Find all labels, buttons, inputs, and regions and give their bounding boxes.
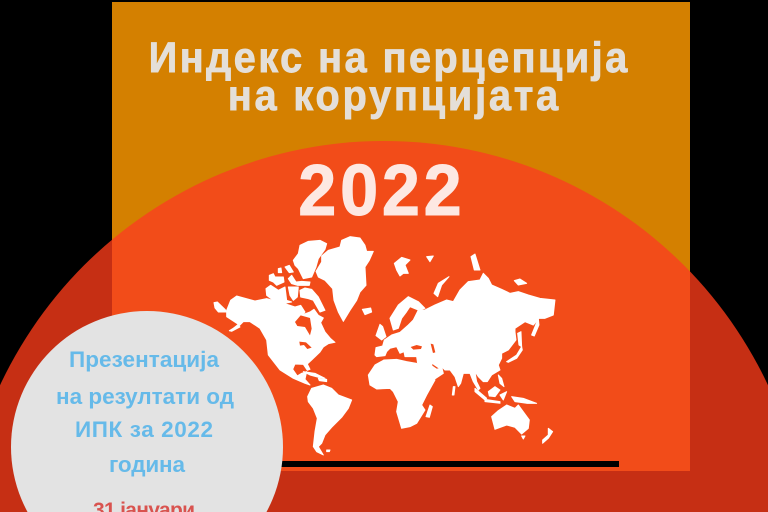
Greenland [316, 237, 373, 321]
Cuba [303, 372, 325, 378]
title: Индекс на перцепција [149, 33, 628, 81]
Africa [368, 359, 435, 428]
Northern Eurasia islands [394, 254, 527, 297]
New Zealand [543, 428, 553, 443]
Alaska tail [229, 325, 240, 331]
Alaska tip [214, 302, 227, 312]
title [149, 33, 628, 119]
Kamchatka [532, 318, 539, 336]
Scandinavia [390, 297, 425, 330]
presentation text: Презентација [69, 347, 219, 372]
Caspian Sea [431, 344, 435, 353]
presentation circle: ИПК за 2022 [75, 417, 213, 442]
Hispaniola [318, 378, 327, 382]
South America [308, 385, 352, 455]
Great Lakes [299, 342, 312, 349]
Southeast Asia and Oceania [452, 375, 553, 443]
baseline bar [270, 461, 619, 467]
presentation circle: година [109, 452, 185, 477]
Arctic Canada islands [266, 237, 373, 321]
Hudson Bay [295, 315, 312, 335]
Japan [507, 347, 522, 362]
Persian Gulf [432, 364, 439, 369]
large dark red semicircle [0, 141, 768, 512]
North America [227, 296, 335, 385]
world map [214, 237, 555, 455]
Ellesmere Island [293, 240, 327, 279]
Iceland [362, 308, 372, 315]
Madagascar [426, 405, 432, 417]
presentation circle: на резултати од [56, 384, 234, 409]
orange panel [112, 2, 690, 471]
Sakhalin [518, 332, 522, 347]
Black Sea [411, 345, 422, 350]
Eurasia [375, 273, 555, 390]
title: на корупцијата [228, 71, 559, 119]
Australia [492, 405, 529, 434]
year 2022: 2022 [298, 149, 462, 230]
presentation circle [11, 311, 283, 512]
Tasmania [522, 436, 525, 439]
red-orange semicircle inside panel [112, 141, 690, 471]
United Kingdom [376, 324, 386, 340]
